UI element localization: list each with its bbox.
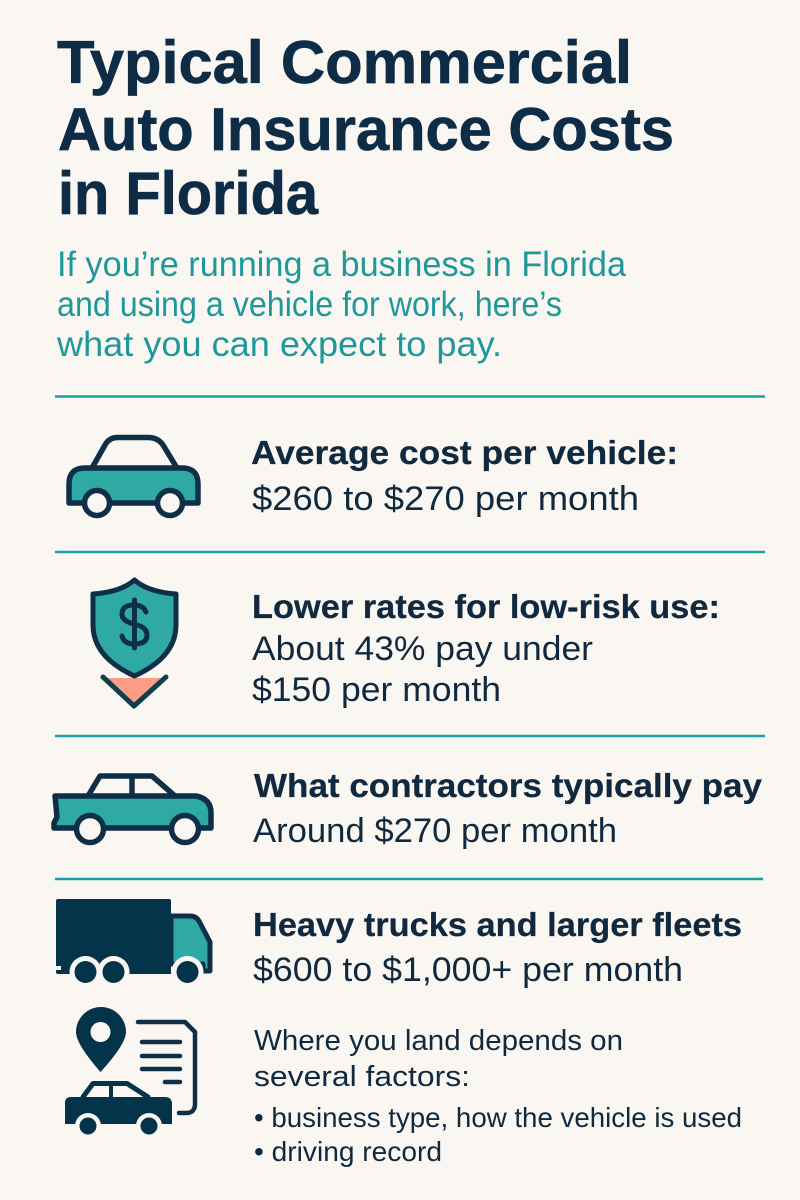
icon: box truck bbox=[56, 899, 210, 988]
item: average cost bbox=[251, 435, 678, 518]
icon: sedan bbox=[54, 776, 211, 842]
item: low-risk rates: About 43% pay under bbox=[252, 630, 593, 668]
item: low-risk rates: Lower rates for low-risk use: bbox=[252, 589, 720, 626]
item: heavy trucks: Heavy trucks and larger fleets bbox=[253, 907, 742, 944]
item: low-risk rates bbox=[252, 589, 720, 709]
factor list: • driving record bbox=[254, 1136, 442, 1167]
subtitle: If you’re running a business in Florida bbox=[57, 245, 627, 284]
item: heavy trucks: $600 to $1,000+ per month bbox=[253, 951, 683, 989]
title: in Florida bbox=[58, 160, 319, 227]
text: factors: several factors: bbox=[254, 1061, 470, 1093]
subtitle: and using a vehicle for work, here’s bbox=[57, 285, 562, 324]
text: factors bbox=[254, 1025, 623, 1093]
item: average cost: $260 to $270 per month bbox=[252, 480, 639, 518]
icon: location pin, document and car bbox=[65, 1007, 195, 1139]
item: average cost: Average cost per vehicle: bbox=[251, 435, 678, 472]
title: Typical Commercial bbox=[57, 29, 632, 96]
title bbox=[57, 29, 674, 227]
title: Auto Insurance Costs bbox=[58, 96, 674, 163]
item: low-risk rates: $150 per month bbox=[252, 671, 501, 709]
text: factors: Where you land depends on bbox=[254, 1025, 623, 1057]
icon: shield with dollar and down arrow bbox=[93, 580, 176, 706]
item: heavy trucks bbox=[253, 907, 742, 989]
subtitle bbox=[56, 245, 627, 364]
factor list bbox=[254, 1102, 742, 1167]
item: contractors bbox=[253, 768, 762, 850]
icon: car bbox=[69, 438, 198, 516]
item: contractors: What contractors typically pay bbox=[254, 768, 762, 805]
subtitle: what you can expect to pay. bbox=[56, 325, 502, 364]
item: contractors: Around $270 per month bbox=[253, 812, 617, 850]
factor list: • business type, how the vehicle is used bbox=[254, 1102, 742, 1133]
